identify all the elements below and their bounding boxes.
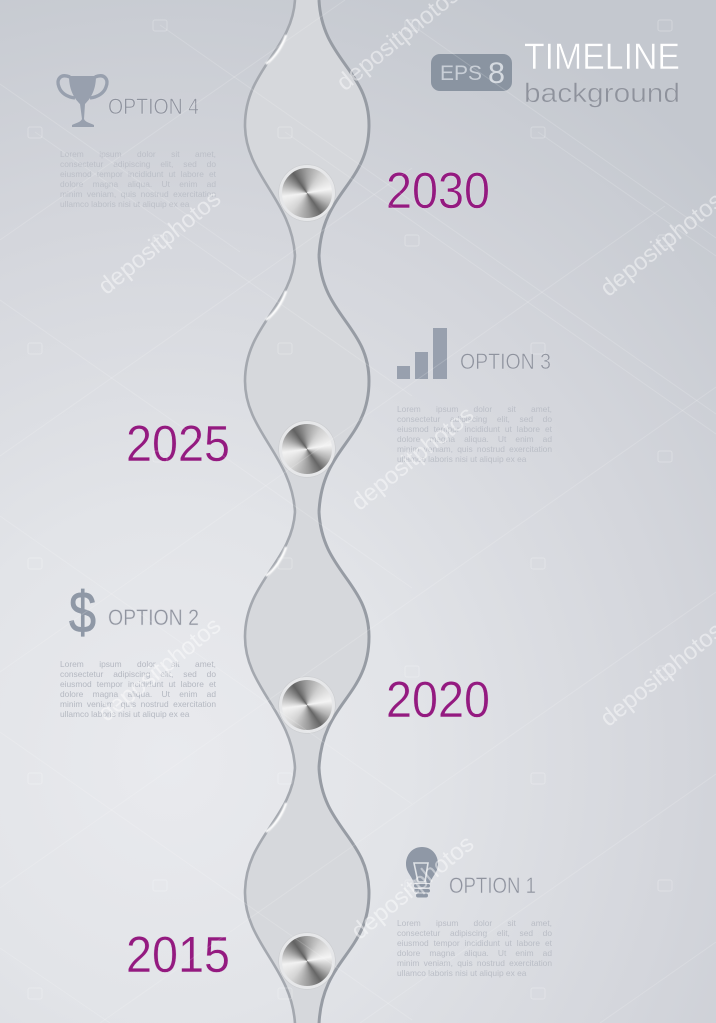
panel: option 2	[60, 584, 216, 719]
body text: dolore magna aliqua. Ut enim ad	[60, 179, 216, 189]
icon: light bulb	[406, 847, 438, 898]
body text: eiusmod tempor incididunt ut labore et	[397, 424, 552, 434]
year 2020: 2020	[386, 671, 490, 728]
EPS 8 badge: EPS	[440, 62, 482, 85]
body text: dolore magna aliqua. Ut enim ad	[60, 689, 216, 699]
year 2030: 2030	[386, 162, 490, 219]
body text: Lorem ipsum dolor sit amet,	[397, 404, 552, 414]
panel: option 3	[397, 328, 552, 464]
watermark overlay: depositphotos	[93, 612, 226, 727]
body text: dolore magna aliqua. Ut enim ad	[397, 434, 552, 444]
body text: ullamco laboris nisi ut aliquip ex ea	[397, 454, 526, 464]
body text: consectetur adipiscing elit, sed do	[60, 669, 216, 679]
body text: consectetur adipiscing elit, sed do	[60, 159, 216, 169]
body text	[397, 918, 552, 978]
body text: eiusmod tempor incididunt ut labore et	[397, 938, 552, 948]
body text: ullamco laboris nisi ut aliquip ex ea	[60, 199, 189, 209]
EPS 8 badge: 8	[488, 57, 505, 90]
panel: option 4	[56, 74, 216, 209]
panel: option 1	[397, 847, 552, 978]
icon: bar chart	[397, 328, 447, 379]
body text: Lorem ipsum dolor sit amet,	[397, 918, 552, 928]
body text: minim veniam, quis nostrud exercitation	[397, 444, 552, 454]
body text: dolore magna aliqua. Ut enim ad	[397, 948, 552, 958]
body text: minim veniam, quis nostrud exercitation	[60, 189, 216, 199]
option label: OPTION 4	[108, 94, 199, 119]
body text: ullamco laboris nisi ut aliquip ex ea	[397, 968, 526, 978]
metal knob 2030	[279, 165, 335, 221]
body text	[60, 149, 216, 209]
EPS 8 badge	[431, 54, 512, 91]
watermark overlay: depositphotos	[93, 185, 226, 300]
watermark overlay: depositphotos	[346, 830, 479, 945]
body text	[60, 659, 216, 719]
title block	[431, 36, 680, 108]
year 2025: 2025	[126, 415, 230, 472]
body text: consectetur adipiscing elit, sed do	[397, 928, 552, 938]
body text: eiusmod tempor incididunt ut labore et	[60, 169, 216, 179]
heading: TIMELINE	[524, 36, 680, 77]
icon: trophy	[58, 76, 107, 127]
body text: minim veniam, quis nostrud exercitation	[60, 699, 216, 709]
option label: OPTION 1	[449, 873, 536, 898]
metal knob 2025	[279, 421, 335, 477]
body text: Lorem ipsum dolor sit amet,	[60, 659, 216, 669]
option label: OPTION 2	[108, 605, 199, 630]
year 2015: 2015	[126, 926, 230, 983]
body text: ullamco laboris nisi ut aliquip ex ea	[60, 709, 189, 719]
subheading: background	[524, 78, 680, 108]
metal knob 2020	[279, 677, 335, 733]
body text: consectetur adipiscing elit, sed do	[397, 414, 552, 424]
body text: Lorem ipsum dolor sit amet,	[60, 149, 216, 159]
body text: minim veniam, quis nostrud exercitation	[397, 958, 552, 968]
body text: eiusmod tempor incididunt ut labore et	[60, 679, 216, 689]
body text	[397, 404, 552, 464]
watermark overlay: depositphotos	[346, 401, 479, 516]
metal knob 2015	[279, 933, 335, 989]
